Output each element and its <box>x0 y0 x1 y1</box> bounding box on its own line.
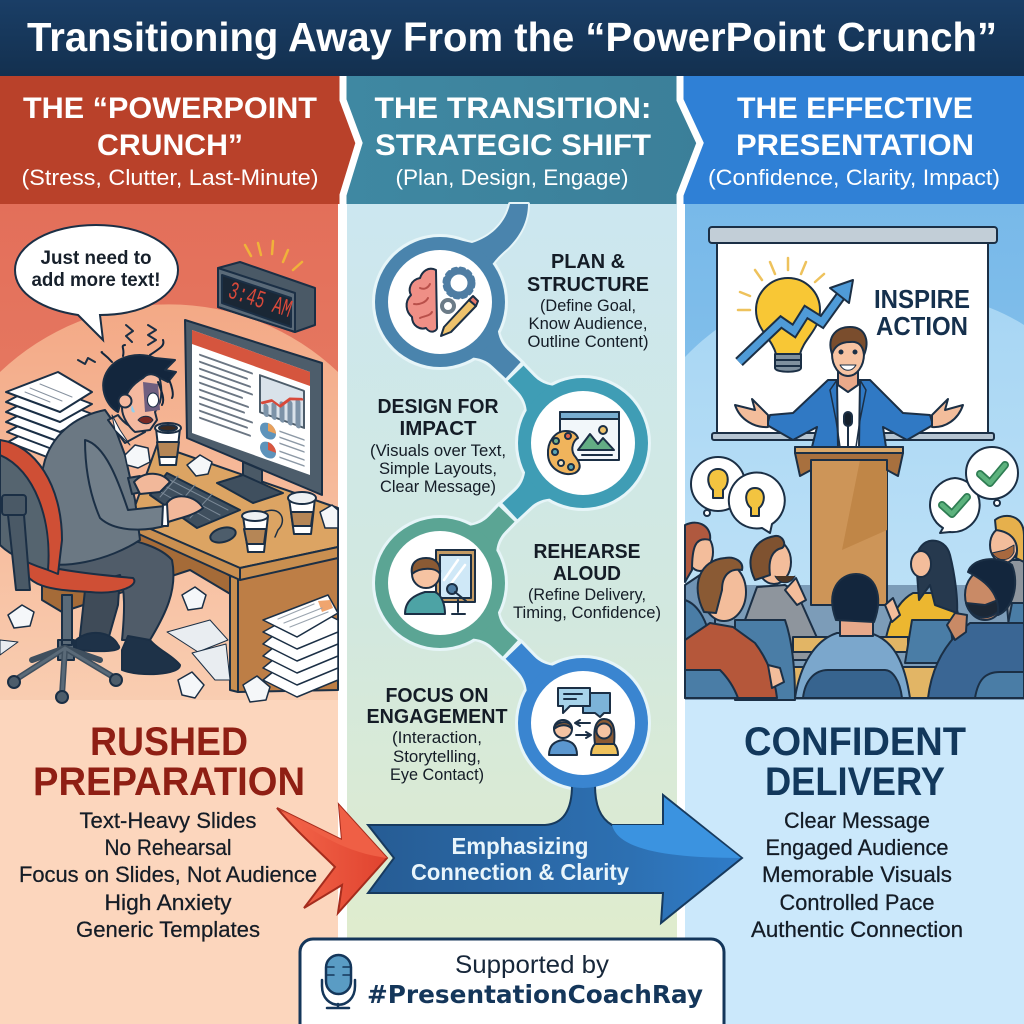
badge: supported by: #PresentationCoachRay <box>367 980 703 1009</box>
icon: desks and chairs <box>685 600 1024 700</box>
panel: transition background <box>347 204 677 1024</box>
heading: confident delivery: DELIVERY <box>765 760 945 804</box>
text block: confident delivery list: Controlled Pace <box>780 890 934 915</box>
icon: office chair <box>8 560 134 703</box>
panel header: teal: STRATEGIC SHIFT <box>375 129 651 162</box>
panel header: blue <box>680 76 1024 204</box>
text: plan and structure: STRUCTURE <box>527 273 649 296</box>
text: design for impact: (Visuals over Text, <box>370 442 506 460</box>
text: inspire action: ACTION <box>876 311 968 341</box>
text: design for impact: Clear Message) <box>380 478 496 496</box>
icon: computer monitor with cluttered slide <box>185 320 322 503</box>
text: plan and structure: Outline Content) <box>528 333 648 351</box>
projection screen <box>709 227 997 440</box>
icon: woman in yellow <box>885 541 965 643</box>
icon: palette and image window <box>548 412 619 474</box>
panel header: blue: (Confidence, Clarity, Impact) <box>708 165 1000 190</box>
icon: desk <box>42 445 338 692</box>
panel header: teal: THE TRANSITION: <box>374 92 652 125</box>
icon: wall clock 3:45 AM <box>218 241 315 332</box>
text: rehearse aloud: Timing, Confidence) <box>513 604 661 622</box>
icon: paper stack right <box>263 595 338 697</box>
panel header: red: (Stress, Clutter, Last-Minute) <box>22 165 318 190</box>
icon: man's torso, head and stress marks <box>30 325 203 565</box>
illustration: stressed man at desk <box>0 241 338 703</box>
panel: rushed preparation background <box>0 204 338 1024</box>
heading: confident delivery <box>744 720 966 804</box>
icon: paper stack left <box>6 372 92 462</box>
icon: man in rust jacket <box>685 558 784 698</box>
illustration: confident presenter and audience <box>685 227 1024 700</box>
text: rehearse aloud: (Refine Delivery, <box>528 586 646 604</box>
panel: step 3 rehearse aloud <box>375 500 661 663</box>
icon: person with mirror and microphone <box>405 550 475 614</box>
panel header: red: THE “POWERPOINT <box>23 92 317 125</box>
icon: crumpled papers <box>8 445 338 702</box>
text: plan and structure: PLAN & <box>551 250 625 273</box>
text: plan and structure: (Define Goal, <box>540 297 636 315</box>
title bar: Transitioning Away From the “PowerPoint Crunch” <box>27 14 997 60</box>
speech bubble: Just need to add more text <box>15 225 178 340</box>
icon: lightbulb with rising arrow <box>738 258 853 372</box>
big blue arrow: emphasizing connection and clarity <box>368 785 742 923</box>
icon: far-left woman <box>685 523 715 640</box>
panel header: teal: (Plan, Design, Engage) <box>396 165 628 190</box>
text block: rushed preparation list: Focus on Slides, Not Audience <box>19 862 317 887</box>
text block: rushed preparation list: Text-Heavy Slides <box>80 808 256 833</box>
panel header: red <box>0 76 700 204</box>
panel header: blue: PRESENTATION <box>736 129 974 162</box>
icon: bearded man in blue suit <box>928 559 1024 698</box>
icon: chat bubbles and two people <box>549 688 618 755</box>
text: focus on engagement: FOCUS ON <box>386 684 488 707</box>
text: design for impact <box>370 395 506 496</box>
text: inspire action <box>874 284 970 341</box>
icon: wall clock 3:45 AM: 3:45 AM <box>225 277 295 325</box>
text: plan and structure: Know Audience, <box>528 315 648 333</box>
heading: rushed preparation: PREPARATION <box>33 760 305 804</box>
heading: confident delivery: CONFIDENT <box>744 720 966 764</box>
connector outlines between steps <box>374 204 649 789</box>
icon: brain, gears and pencil <box>407 268 478 336</box>
icon: man in grey jacket <box>745 536 818 660</box>
big blue arrow: emphasizing connection and clarity: Emphasizing <box>452 833 588 859</box>
text: inspire action: INSPIRE <box>874 284 970 314</box>
icon: audience thought bubbles <box>691 447 1018 533</box>
badge: supported by <box>300 939 724 1024</box>
speech bubble: Just need to add more text: Just need to <box>40 247 152 269</box>
text block: rushed preparation list: No Rehearsal <box>104 835 232 860</box>
text: focus on engagement: (Interaction, <box>392 729 482 747</box>
text block: rushed preparation list <box>19 808 317 942</box>
text block: confident delivery list: Authentic Connection <box>751 917 963 942</box>
text block: rushed preparation list: Generic Templates <box>76 917 260 942</box>
icon: chair back <box>0 440 62 590</box>
panel header: blue: THE EFFECTIVE <box>737 92 973 125</box>
icon: microphone <box>322 955 355 1008</box>
text block: confident delivery list: Memorable Visuals <box>762 862 952 887</box>
heading: rushed preparation <box>33 720 305 804</box>
icon: floor band behind audience <box>685 585 1024 700</box>
panel: step 1 plan and structure <box>375 204 649 385</box>
text block: confident delivery list: Clear Message <box>784 808 930 833</box>
icon: coffee cups <box>155 423 316 552</box>
text: focus on engagement: ENGAGEMENT <box>366 705 508 728</box>
icon: presenter <box>735 327 963 447</box>
big blue arrow: emphasizing connection and clarity: Connection & Clarity <box>411 859 629 885</box>
icon: keyboard and mouse <box>150 473 240 545</box>
text: rehearse aloud: ALOUD <box>553 562 621 585</box>
text block: confident delivery list: Engaged Audience <box>766 835 948 860</box>
panel header: teal <box>343 76 700 204</box>
panel: effective presentation background <box>685 204 1024 1024</box>
text block: rushed preparation list: High Anxiety <box>104 890 232 915</box>
speech bubble: Just need to add more text: add more text! <box>32 269 160 291</box>
panel: step 2 design for impact <box>370 359 648 526</box>
icon: man seen from behind in centre <box>795 574 910 698</box>
icon: podium <box>795 447 903 605</box>
text: focus on engagement: Eye Contact) <box>390 766 484 784</box>
text: design for impact: Simple Layouts, <box>379 460 497 478</box>
red arrow from rushed preparation <box>277 805 387 913</box>
icon: loose sheets on floor <box>0 620 230 680</box>
text: plan and structure <box>527 250 649 351</box>
text: rehearse aloud <box>513 540 661 622</box>
heading: rushed preparation: RUSHED <box>90 720 248 764</box>
panel header: red: CRUNCH” <box>97 129 243 162</box>
title bar <box>0 0 1024 76</box>
text: rehearse aloud: REHEARSE <box>534 540 640 563</box>
panel: step 4 focus on engagement <box>366 637 648 788</box>
icon: blond man <box>990 516 1024 640</box>
text: focus on engagement: Storytelling, <box>393 748 481 766</box>
text: focus on engagement <box>366 684 508 784</box>
icon: man's legs and shoes <box>35 537 180 674</box>
badge: supported by: Supported by <box>455 951 610 979</box>
text: design for impact: DESIGN FOR <box>378 395 499 418</box>
text block: confident delivery list <box>751 808 963 942</box>
text: design for impact: IMPACT <box>400 417 477 440</box>
